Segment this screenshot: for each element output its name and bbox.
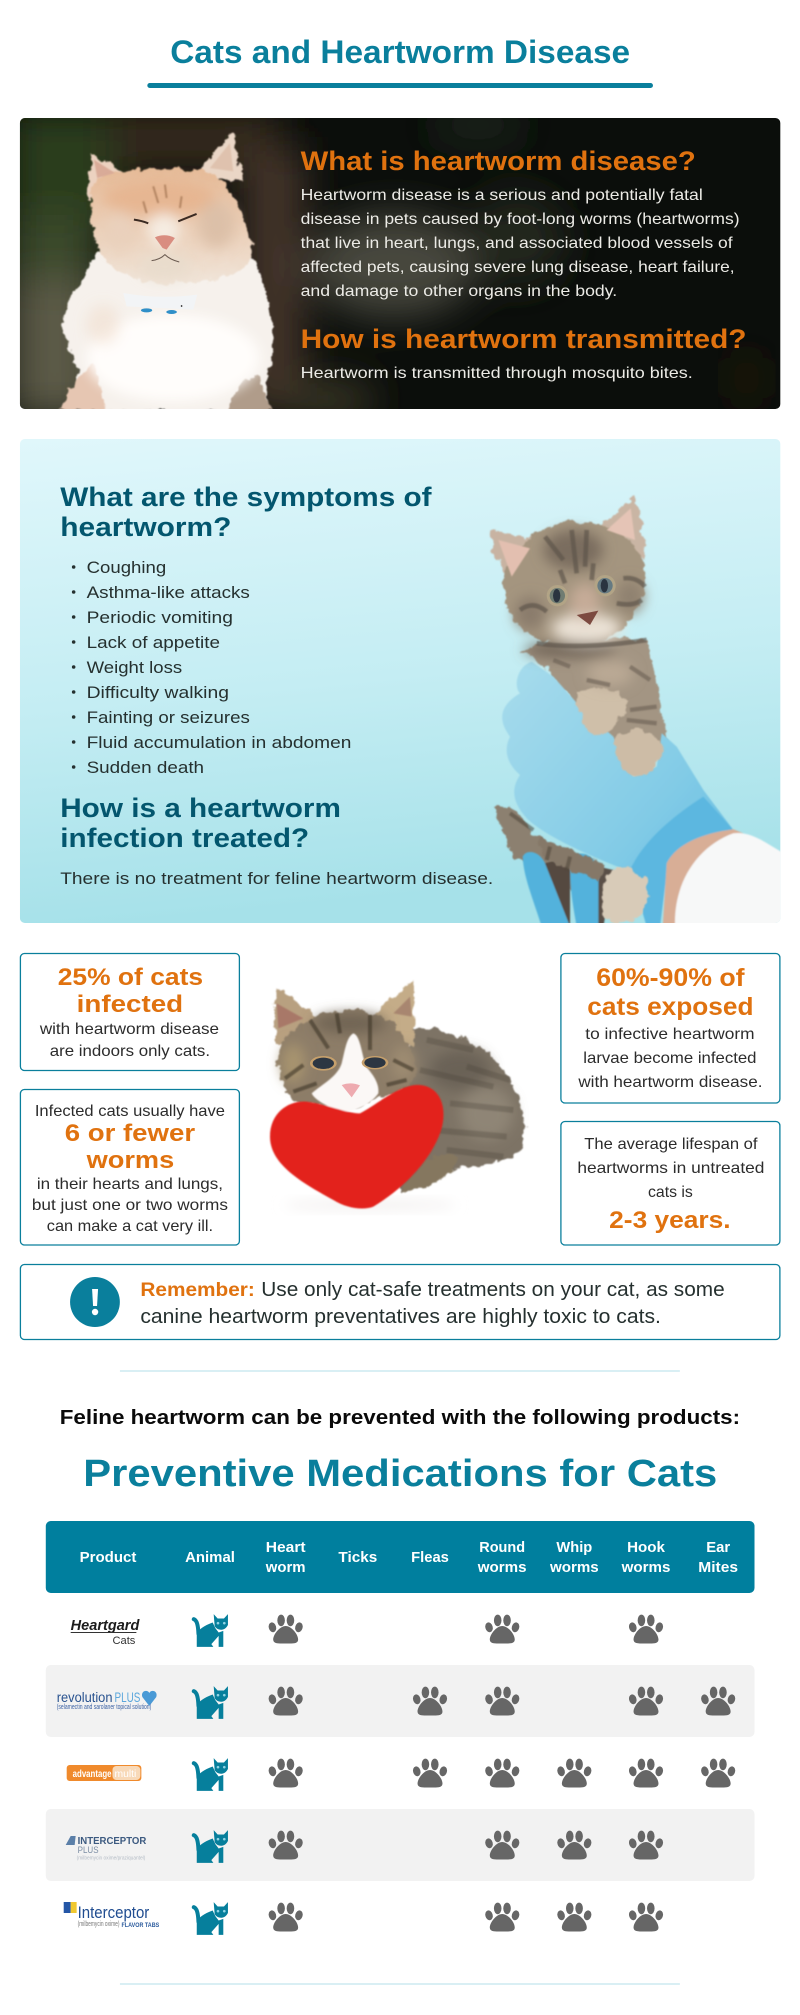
table header: worms [477,1559,527,1576]
logo: revolution PLUS [57,1689,157,1711]
icon: exclamation [70,1277,120,1327]
heading: treatment [60,793,341,853]
stat box: average lifespan: heartworms in untreated [577,1160,764,1177]
table header: worm [265,1559,306,1576]
logo: Heartgard: Heartgard [71,1617,140,1634]
text: transmission: Heartworm is transmitted through mosquito bites. [301,365,693,382]
list: symptoms: Periodic vomiting [87,608,233,627]
title [147,34,653,88]
logo: revolution PLUS: (selamectin and sarolaner topical solution) [57,1704,151,1711]
stat box: 25 percent: infected [77,991,183,1018]
row: Heartgard [71,1614,664,1647]
list: symptoms: Weight loss [87,658,182,677]
table header: Ear [706,1539,730,1556]
stat box: average lifespan: 2-3 years. [609,1207,731,1234]
callout: remember [20,1264,780,1340]
row: Interceptor [64,1902,664,1935]
list: symptoms: Difficulty walking [87,683,229,702]
logo: Interceptor Plus: PLUS [78,1845,99,1855]
callout: remember: Remember: [140,1279,255,1301]
heading: what is heartworm disease: What is heartworm disease? [301,146,696,176]
logo: Interceptor: Interceptor [78,1903,150,1922]
logo: Interceptor: (milbemycin oxime) [78,1921,119,1928]
table header: Mites [698,1559,738,1576]
text: heartworm definition [301,187,740,300]
list: symptoms: Asthma-like attacks [87,583,250,602]
heading: treatment: How is a heartworm [60,793,341,823]
stat box: 6 or fewer worms: 6 or fewer [65,1120,195,1147]
table: preventive medications [46,1521,755,1935]
text: heartworm definition: affected pets, causing severe lung disease, heart failure, [301,259,735,276]
table header: Ticks [338,1549,377,1566]
stat box: 6 or fewer worms [20,1090,239,1245]
logo: Heartgard [71,1617,140,1647]
callout: remember: canine heartworm preventatives are highly toxic to cats. [140,1306,661,1328]
table header: Heart [266,1539,306,1556]
stat box: 25 percent: with heartworm disease [39,1021,219,1038]
logo: revolution PLUS: revolution [57,1689,112,1705]
stat box: 60 to 90 percent: to infective heartworm [585,1026,755,1043]
text: heartworm definition: and damage to other organs in the body. [301,283,617,300]
text: heartworm definition: Heartworm disease is a serious and potentially fatal [301,187,703,204]
table header: worms [621,1559,670,1576]
table header: Product [80,1549,136,1566]
stat box: average lifespan: The average lifespan of [584,1136,758,1153]
stat box: 6 or fewer worms: can make a cat very ill. [47,1218,213,1235]
heading: treatment: infection treated? [60,823,309,853]
photo: kitten held by gloved hand [490,497,790,927]
logo: Interceptor Plus: INTERCEPTOR [78,1836,146,1847]
photo: kitten resting on red heart [270,980,525,1210]
stat box: average lifespan [561,1122,780,1245]
row: revolution PLUS [46,1665,755,1737]
heading: symptoms [60,482,433,542]
logo: Heartgard: Cats [112,1635,136,1647]
list: symptoms: Fainting or seizures [87,708,250,727]
heading: preventive medications: Preventive Medications for Cats [83,1453,717,1495]
row: Interceptor Plus [46,1809,755,1881]
stat box: 60 to 90 percent [561,954,780,1103]
logo: Interceptor Plus [66,1836,146,1862]
stat box: 60 to 90 percent: cats exposed [587,993,754,1021]
text: no treatment: There is no treatment for feline heartworm disease. [60,869,493,888]
stat box: 6 or fewer worms: Infected cats usually have [35,1103,225,1120]
heading: symptoms: What are the symptoms of [60,482,433,512]
photo: fluffy ginger cat [60,131,273,411]
list: symptoms: Sudden death [87,758,204,777]
list: symptoms: Lack of appetite [87,633,220,652]
stat box: 25 percent [20,954,239,1070]
stat box: 25 percent: are indoors only cats. [50,1043,210,1060]
stat box: 25 percent: 25% of cats [58,964,203,991]
logo: Interceptor [64,1902,159,1929]
stat box: 6 or fewer worms: in their hearts and lungs, [37,1176,223,1193]
table header [46,1521,755,1593]
table header: Whip [556,1539,592,1556]
logo: revolution PLUS: PLUS [114,1689,140,1705]
text: heartworm definition: that live in heart, lungs, and associated blood vessels of [301,235,733,252]
title: Cats and Heartworm Disease [170,34,630,70]
heading: how is heartworm transmitted: How is heartworm transmitted? [301,324,747,354]
logo: Interceptor: FLAVOR TABS [121,1923,159,1929]
text: prevention intro: Feline heartworm can be prevented with the following products: [60,1406,740,1429]
callout: remember: Use only cat-safe treatments on your cat, as some [261,1279,725,1301]
table header: Round [479,1539,525,1556]
stat box: 60 to 90 percent: with heartworm disease. [577,1074,762,1091]
logo: advantage multi: advantage [73,1769,112,1780]
table header: Animal [185,1549,235,1566]
table header: Fleas [411,1549,449,1566]
panel: what is heartworm [10,107,780,420]
logo: advantage multi [67,1765,141,1781]
stat box: 60 to 90 percent: 60%-90% of [596,964,745,992]
panel: symptoms and treatment [20,439,790,927]
logo: advantage multi: multi [114,1769,136,1780]
stat box: 6 or fewer worms: but just one or two worms [32,1197,228,1214]
table header: Hook [627,1539,666,1556]
logo: Interceptor Plus: (milbemycin oxime/praziquantel) [77,1855,145,1862]
list: symptoms: Fluid accumulation in abdomen [87,733,351,752]
stat box: average lifespan: cats is [648,1184,693,1201]
list: symptoms [72,558,351,777]
text: heartworm definition: disease in pets caused by foot-long worms (heartworms) [301,211,740,228]
table header: worms [549,1559,599,1576]
stat box: 60 to 90 percent: larvae become infected [583,1050,757,1067]
list: symptoms: Coughing [87,558,166,577]
row: advantage multi [67,1758,736,1791]
heading: symptoms: heartworm? [60,512,231,542]
stat box: 6 or fewer worms: worms [85,1147,174,1174]
